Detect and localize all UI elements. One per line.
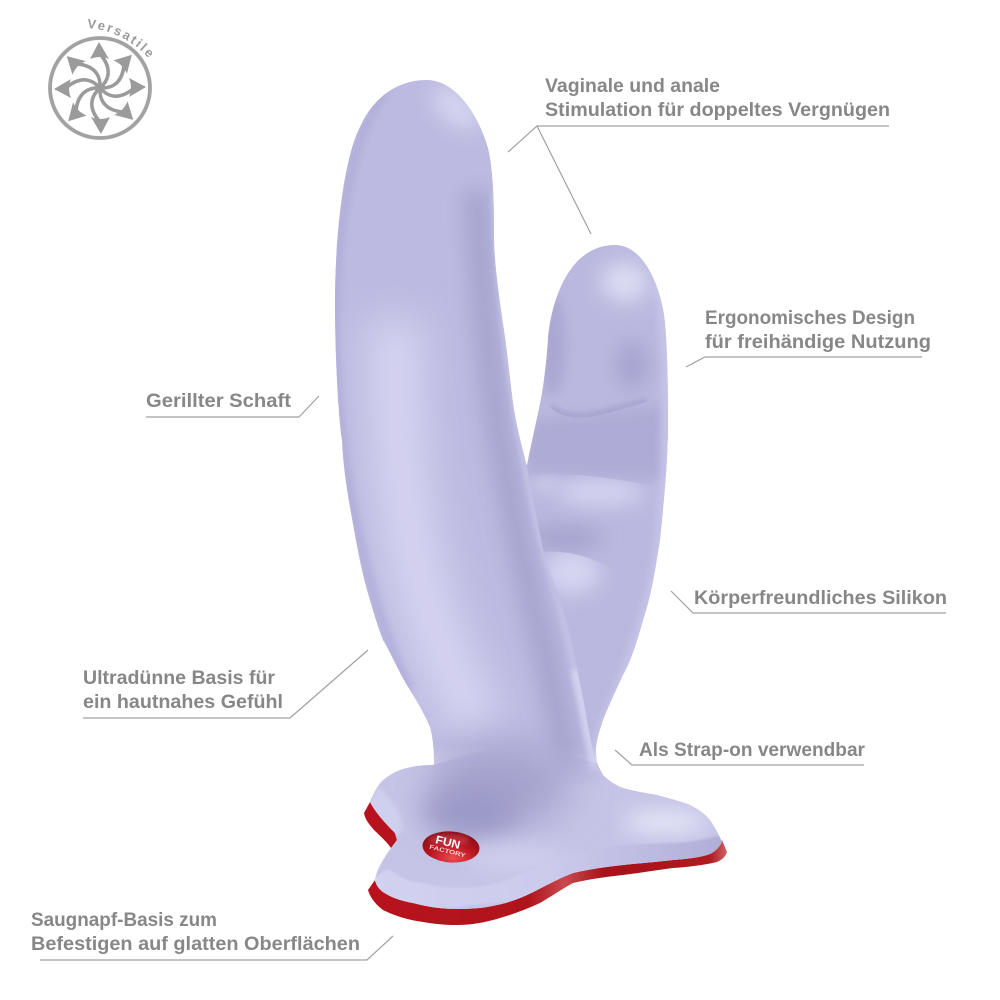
central shadow [422, 788, 518, 836]
base bevel rim [375, 836, 722, 908]
icon label: Versatile [88, 19, 152, 57]
shaft neck rim [575, 670, 595, 770]
base plate [370, 740, 722, 909]
ridge two highlight [544, 550, 600, 594]
red suction base [364, 802, 727, 925]
callout: stimulation: Stimulation für doppeltes Vergnügen [545, 100, 890, 121]
callout: strap-on: Als Strap-on verwendbar [639, 740, 866, 761]
callout: ergonomic design: für freihändige Nutzung [705, 332, 931, 353]
neck shadow [430, 743, 570, 827]
icon: versatile badge [48, 19, 152, 140]
icon ring [50, 38, 150, 138]
callout: ergonomic design [686, 308, 931, 367]
logo badge [421, 830, 481, 864]
callout: ribbed shaft [146, 391, 319, 417]
callout: ergonomic design: Ergonomisches Design [705, 308, 915, 329]
finger right rim [600, 288, 668, 730]
shaft right rim [492, 194, 574, 668]
knuckle shadow [550, 402, 647, 418]
callout: suction base: Saugnapf-Basis zum [31, 910, 217, 931]
callout: suction base: Befestigen auf glatten Oberflächen [31, 934, 360, 955]
left lobe highlight [370, 790, 401, 836]
shaft tip highlight [431, 84, 478, 132]
main shaft [335, 79, 600, 790]
callout: silicone: Körperfreundliches Silikon [694, 588, 947, 609]
shaft centre glow [395, 320, 480, 730]
right top highlight [623, 810, 707, 834]
ridge two shadow [527, 526, 603, 550]
logo badge: FACTORY [429, 845, 466, 859]
callout: ultra-thin base: Ultradünne Basis für [83, 668, 276, 689]
icon arrows [54, 42, 146, 134]
callout: ultra-thin base: ein hautnahes Gefühl [83, 692, 283, 713]
callout: ultra-thin base [83, 650, 368, 718]
callout: ribbed shaft: Gerillter Schaft [146, 391, 292, 412]
rear finger [526, 245, 668, 765]
logo badge: FUN [434, 834, 461, 852]
callout: stimulation [508, 76, 890, 234]
finger left shade [542, 297, 566, 391]
callout: suction base [31, 910, 393, 960]
shaft left edge [335, 90, 410, 690]
finger tip highlight [601, 262, 649, 302]
shaft dark band [476, 190, 570, 790]
centre highlight [479, 842, 540, 866]
base shading [368, 743, 707, 870]
finger lower tone [527, 410, 668, 478]
callout: stimulation: Vaginale und anale [545, 76, 720, 97]
ridge one highlight [531, 477, 644, 506]
product illustration [335, 79, 730, 925]
finger dimple [617, 341, 647, 389]
